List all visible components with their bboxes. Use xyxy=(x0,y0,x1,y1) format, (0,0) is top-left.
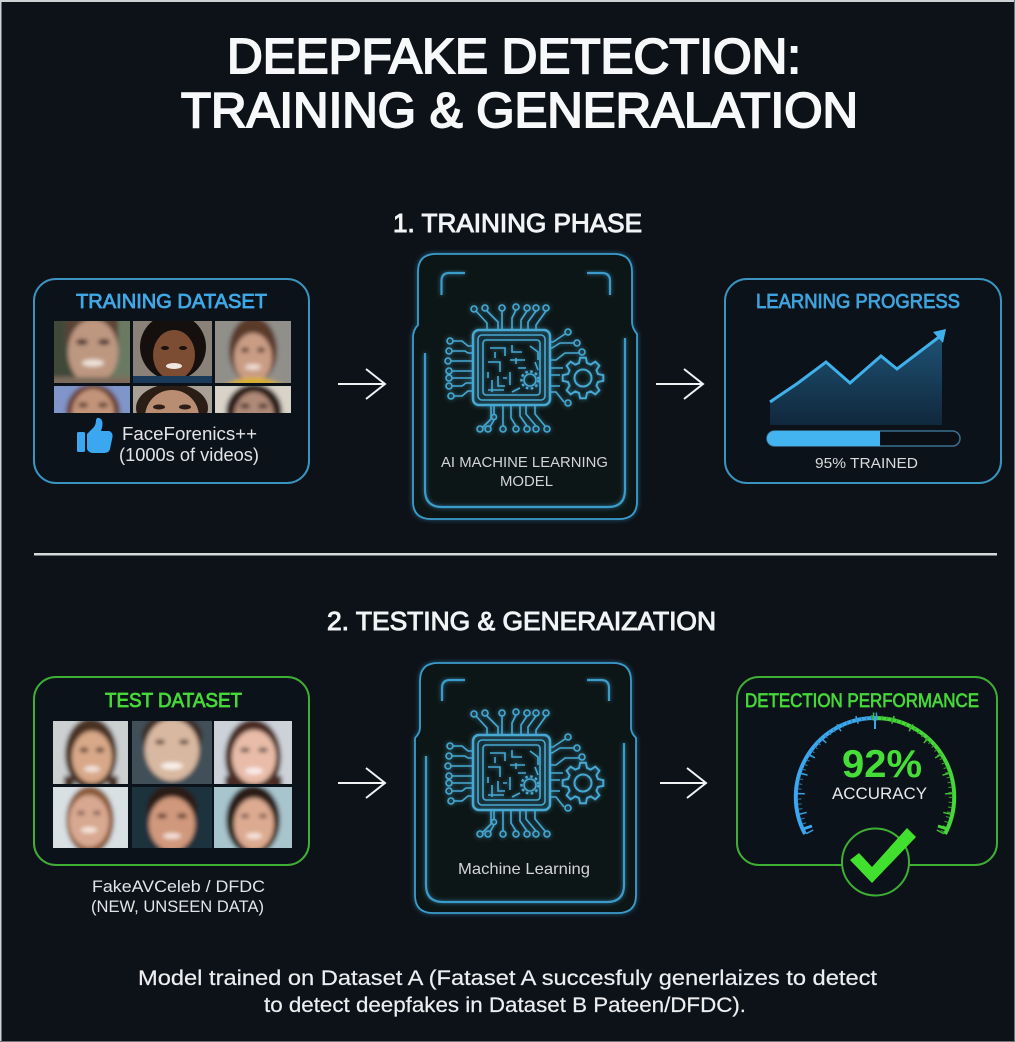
panel: test dataset xyxy=(34,677,309,865)
footer caption xyxy=(138,967,877,1017)
divider xyxy=(34,553,997,556)
value: 92% accuracy: 92% xyxy=(842,743,922,786)
area chart with arrow xyxy=(770,329,946,425)
label: machine learning: Machine Learning xyxy=(458,861,590,878)
arrow xyxy=(656,369,703,399)
label: FakeAVCeleb / DFDC xyxy=(91,877,265,916)
panel: detection performance xyxy=(737,677,997,896)
heading: testing and generalization: 2. TESTING & GENERAIZATION xyxy=(327,606,716,636)
label: FaceForenics++: FaceForenics++ xyxy=(122,424,257,444)
icon: circuit chip with gear xyxy=(445,709,603,837)
value: 92% accuracy xyxy=(832,743,927,803)
panel: learning progress xyxy=(725,279,1001,483)
arrow xyxy=(338,369,385,399)
icon: circuit chip with gear xyxy=(445,304,603,432)
progress bar xyxy=(767,431,960,446)
label: 95% trained: 95% TRAINED xyxy=(815,455,918,472)
footer caption: to detect deepfakes in Dataset B Pateen/DFDC). xyxy=(264,994,746,1017)
heading: training phase: 1. TRAINING PHASE xyxy=(393,208,642,238)
image grid: test faces xyxy=(53,721,292,848)
arrow xyxy=(660,768,706,798)
footer caption: Model trained on Dataset A (Fataset A succesfuly generlaizes to detect xyxy=(138,967,877,990)
label: FakeAVCeleb / DFDC: (NEW, UNSEEN DATA) xyxy=(91,897,264,916)
panel heading: learning progress: LEARNING PROGRESS xyxy=(756,291,960,313)
title xyxy=(181,30,858,138)
value: 92% accuracy: ACCURACY xyxy=(832,784,927,803)
panel: training dataset xyxy=(34,279,309,483)
panel heading: training dataset: TRAINING DATASET xyxy=(76,291,267,313)
panel heading: test dataset: TEST DATASET xyxy=(105,690,242,712)
icon: check mark badge xyxy=(842,828,916,896)
icon: thumbs up xyxy=(77,418,113,453)
panel: AI machine learning model xyxy=(413,254,637,519)
arrow xyxy=(338,768,385,798)
label: FaceForenics++ xyxy=(119,424,259,465)
label: AI machine learning model: AI MACHINE LEARNING xyxy=(441,454,608,471)
image grid: training faces xyxy=(54,321,291,413)
panel heading: detection performance: DETECTION PERFORMANCE xyxy=(745,691,979,712)
gauge xyxy=(796,716,954,834)
label: AI machine learning model xyxy=(441,454,608,490)
title: TRAINING & GENERALATION xyxy=(181,84,858,138)
panel: machine learning xyxy=(415,663,636,913)
label: FakeAVCeleb / DFDC: FakeAVCeleb / DFDC xyxy=(92,877,265,896)
label: FaceForenics++: (1000s of videos) xyxy=(119,445,259,465)
label: AI machine learning model: MODEL xyxy=(500,473,553,490)
title: DEEPFAKE DETECTION: xyxy=(227,30,801,84)
